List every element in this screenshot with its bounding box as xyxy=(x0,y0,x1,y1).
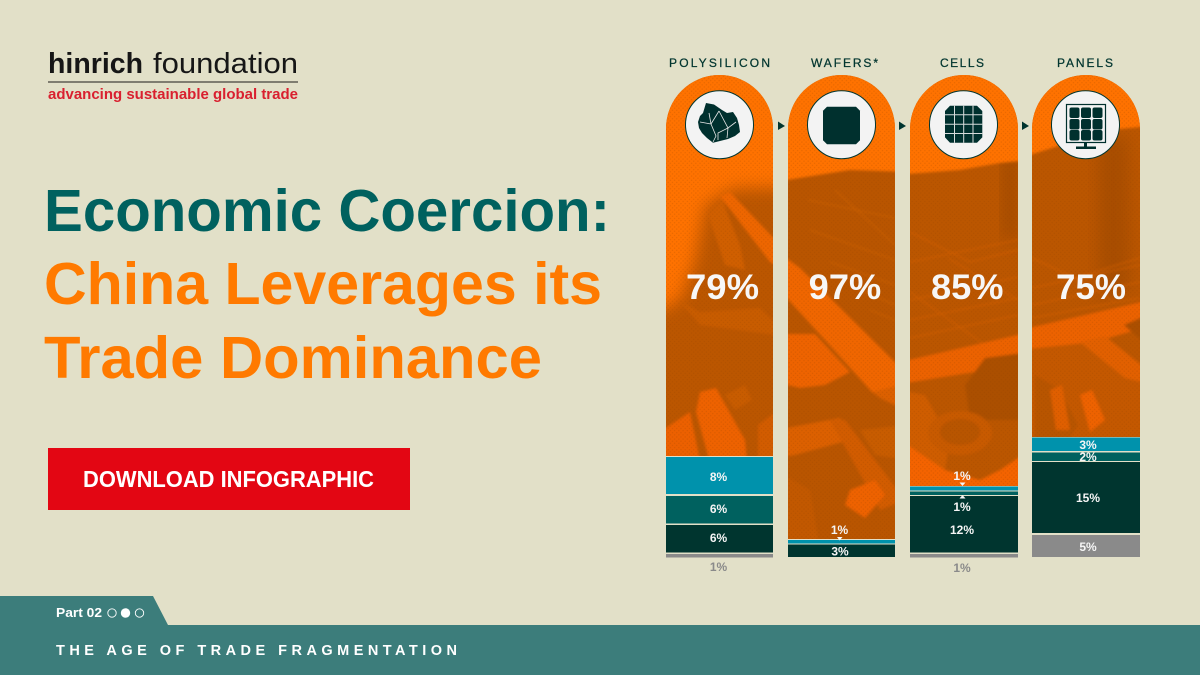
stacked segments: cells: 12% xyxy=(950,523,974,537)
icon: polysilicon rock xyxy=(686,91,754,159)
logo: hinrich foundation: advancing sustainable global trade xyxy=(48,86,298,103)
title: Economic Coercion: xyxy=(44,178,610,244)
stacked segments: panels: 2% xyxy=(1079,450,1097,464)
label: panels: PANELS xyxy=(1057,56,1113,70)
arrow: wafers to cells xyxy=(899,122,906,130)
stacked segments: cells: 1% xyxy=(953,561,971,575)
stacked segments: cells: 1% xyxy=(953,500,971,514)
orange bar: polysilicon 79% xyxy=(666,75,773,456)
stacked segments: wafers: 3% xyxy=(831,544,849,558)
logo: hinrich foundation: hinrich xyxy=(48,48,143,80)
footer band xyxy=(0,596,1200,675)
series title: THE AGE OF TRADE FRAGMENTATION xyxy=(56,643,457,659)
button: download infographic xyxy=(48,448,410,510)
stacked segments: cells: 1% xyxy=(953,469,971,483)
logo: hinrich foundation: foundation xyxy=(153,48,298,80)
label: polysilicon: POLYSILICON xyxy=(669,56,770,70)
column: wafers xyxy=(788,58,895,557)
stacked segments: panels: 5% xyxy=(1079,540,1097,554)
stacked segments: polysilicon: 1% xyxy=(710,560,728,574)
arrow: cells to panels xyxy=(1022,122,1029,130)
stacked segments: cells xyxy=(910,469,1018,575)
label: cells: CELLS xyxy=(940,56,984,70)
button: download infographic: DOWNLOAD INFOGRAPHIC xyxy=(83,466,374,492)
stacked segments: polysilicon: 8% xyxy=(710,470,728,484)
stat: panels 75%: 75% xyxy=(1056,268,1126,307)
logo: hinrich foundation xyxy=(48,48,298,103)
column: panels xyxy=(1032,58,1140,557)
label: wafers: WAFERS* xyxy=(811,56,878,70)
stacked segments: panels: 3% xyxy=(1079,438,1097,452)
stacked segments: polysilicon: 6% xyxy=(710,502,728,516)
stacked segments: polysilicon xyxy=(666,457,773,574)
title xyxy=(44,178,610,391)
arrow: polysilicon to wafers xyxy=(778,122,785,130)
icon: wafer xyxy=(808,91,876,159)
stacked segments: panels: 15% xyxy=(1076,491,1100,505)
stacked segments: polysilicon: 6% xyxy=(710,531,728,545)
stacked segments: wafers: 1% xyxy=(831,523,849,537)
stacked segments: wafers xyxy=(788,523,895,558)
title: Trade Dominance xyxy=(44,325,542,391)
column: polysilicon xyxy=(666,58,773,571)
orange bar: panels 75% xyxy=(1032,75,1140,437)
part indicator: Part 02 xyxy=(56,606,102,620)
icon: solar cell xyxy=(930,91,998,159)
title: China Leverages its xyxy=(44,251,602,317)
stat: cells 85%: 85% xyxy=(931,268,1004,307)
stacked segments: panels xyxy=(1032,438,1140,557)
part indicator xyxy=(56,606,144,620)
orange bar: cells 85% xyxy=(910,75,1018,486)
icon: solar panel xyxy=(1052,91,1120,159)
column: cells xyxy=(910,58,1018,572)
stat: wafers 97%: 97% xyxy=(809,268,881,307)
stat: polysilicon 79%: 79% xyxy=(686,268,759,307)
orange bar: wafers 97% xyxy=(788,75,895,539)
